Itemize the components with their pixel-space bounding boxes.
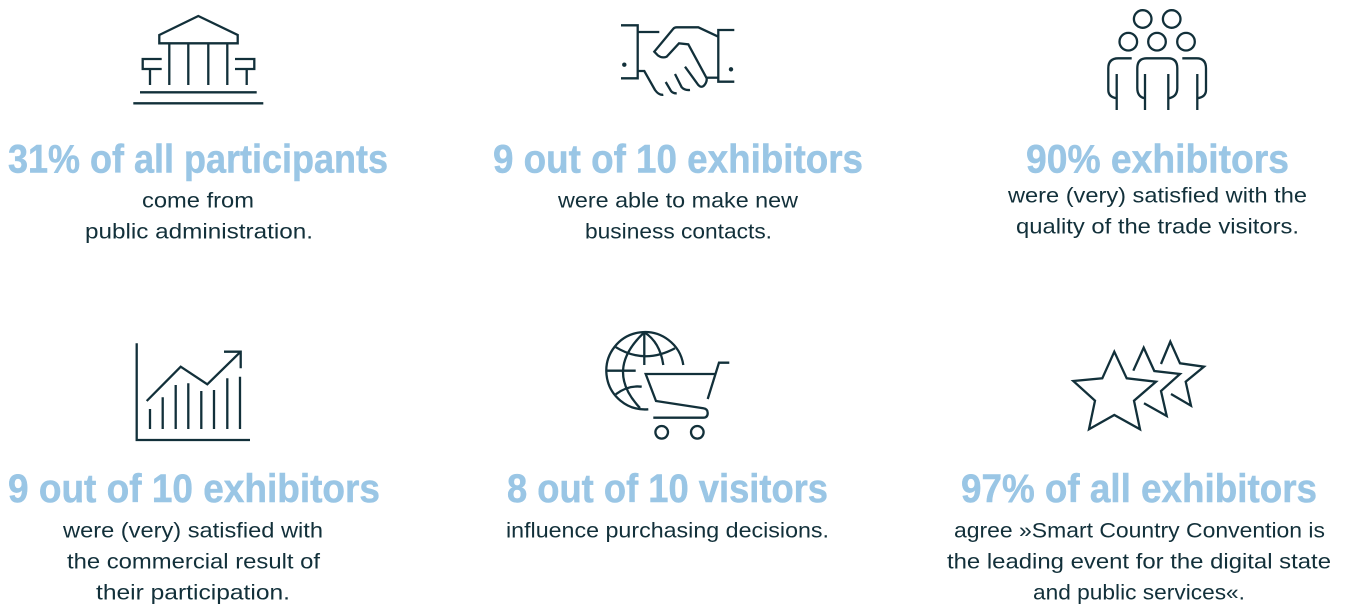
panel: public administration bbox=[8, 16, 388, 243]
icon: handshake bbox=[621, 25, 734, 95]
text: leading event statement: and public services«. bbox=[1033, 580, 1245, 604]
text: satisfied with commercial result bbox=[62, 518, 323, 604]
heading: 97% of all exhibitors: 97% of all exhibitors bbox=[961, 467, 1317, 511]
text: come from public administration: come from bbox=[142, 188, 254, 212]
text: satisfied with visitor quality: quality of the trade visitors. bbox=[1016, 214, 1299, 238]
text: leading event statement bbox=[947, 518, 1331, 604]
panel: leading event bbox=[947, 342, 1331, 604]
text: come from public administration: public administration. bbox=[85, 219, 313, 243]
panel: new business contacts bbox=[493, 25, 863, 243]
text: come from public administration bbox=[85, 188, 313, 243]
icon: three stars bbox=[1073, 342, 1204, 429]
text: satisfied with visitor quality bbox=[1007, 183, 1307, 238]
panel: commercial result bbox=[8, 343, 380, 604]
text: satisfied with commercial result: the commercial result of bbox=[67, 550, 320, 574]
text: leading event statement: the leading event for the digital state bbox=[947, 550, 1331, 574]
panel: quality of trade visitors bbox=[1007, 10, 1307, 238]
text: satisfied with visitor quality: were (very) satisfied with the bbox=[1007, 183, 1307, 207]
text: new business contacts bbox=[557, 188, 799, 243]
text: new business contacts: business contacts. bbox=[585, 219, 772, 243]
text: new business contacts: were able to make new bbox=[557, 188, 799, 212]
heading: 8 out of 10 visitors: 8 out of 10 visitors bbox=[507, 467, 828, 511]
icon: globe and shopping cart bbox=[606, 332, 729, 439]
icon: rising bar chart bbox=[137, 343, 250, 440]
icon: government building bbox=[133, 16, 263, 103]
heading: 9 out of 10 exhibitors: 9 out of 10 exhibitors bbox=[8, 467, 380, 511]
heading: 90% exhibitors: 90% exhibitors bbox=[1026, 138, 1289, 182]
panel: purchasing decisions bbox=[506, 332, 829, 542]
text: leading event statement: agree »Smart Country Convention is bbox=[954, 518, 1325, 542]
text: influence purchasing decisions: influence purchasing decisions. bbox=[506, 518, 829, 542]
icon: group of people bbox=[1108, 10, 1206, 110]
heading: 9 out of 10 exhibitors: 9 out of 10 exhibitors bbox=[493, 138, 863, 182]
heading: 31% of all participants: 31% of all participants bbox=[8, 138, 388, 182]
text: satisfied with commercial result: were (very) satisfied with bbox=[62, 518, 323, 542]
text: satisfied with commercial result: their participation. bbox=[96, 580, 290, 604]
